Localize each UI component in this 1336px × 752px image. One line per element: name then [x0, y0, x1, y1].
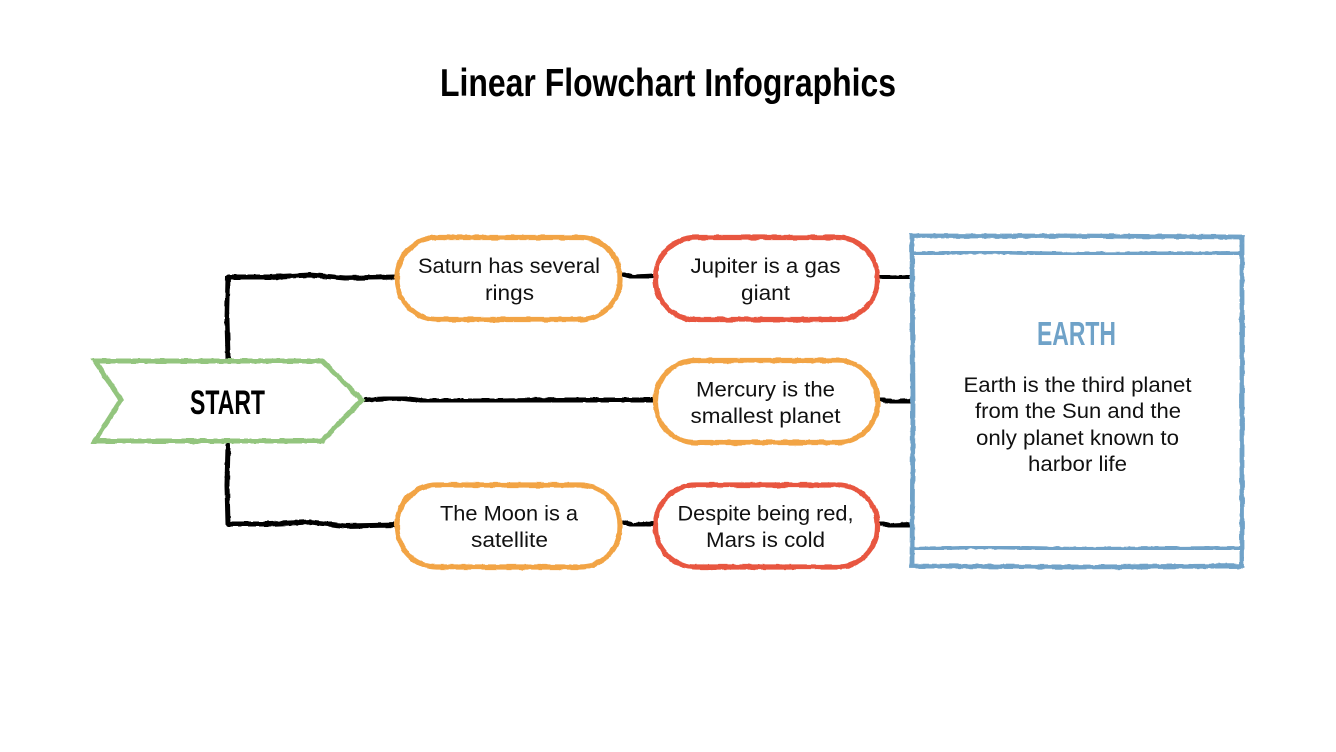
Earth heading: EARTH	[1037, 315, 1116, 352]
start label: START	[190, 384, 265, 422]
pill: Moon	[397, 485, 620, 567]
pill: Mars: Despite being red,	[678, 502, 854, 526]
connector: Mercury to Earth	[880, 399, 911, 402]
connector: start to Mercury	[366, 398, 654, 401]
Earth description	[964, 373, 1192, 476]
connector: Jupiter to Earth	[880, 276, 910, 278]
pill: Saturn: rings	[485, 281, 534, 305]
title: Linear Flowchart Infographics	[440, 62, 896, 105]
pill: Saturn	[397, 238, 620, 320]
Earth description: from the Sun and the	[975, 399, 1181, 423]
Earth description: harbor life	[1028, 452, 1127, 476]
pill: Jupiter: Jupiter is a gas	[690, 254, 840, 278]
Earth description: only planet known to	[976, 426, 1179, 450]
pill: Mercury: Mercury is the	[696, 378, 835, 402]
connector: start to Moon	[227, 445, 396, 526]
panel: Earth	[912, 236, 1242, 567]
pill: Moon: The Moon is a	[440, 502, 578, 526]
pill: Mercury: smallest planet	[690, 404, 841, 428]
pill: Mars: Mars is cold	[706, 528, 825, 552]
connector: start to Saturn	[227, 275, 396, 358]
Earth description: Earth is the third planet	[964, 373, 1192, 397]
pill: Mars	[656, 485, 878, 567]
pill: Jupiter	[656, 238, 878, 320]
connector: Mars to Earth	[880, 523, 910, 526]
pill: Mercury	[656, 360, 878, 442]
start arrow	[95, 361, 362, 441]
connector: Moon to Mars	[622, 522, 654, 525]
connector: Saturn to Jupiter	[622, 274, 654, 277]
pill: Saturn: Saturn has several	[418, 254, 600, 278]
pill: Jupiter: giant	[741, 281, 790, 305]
pill: Moon: satellite	[471, 528, 548, 552]
